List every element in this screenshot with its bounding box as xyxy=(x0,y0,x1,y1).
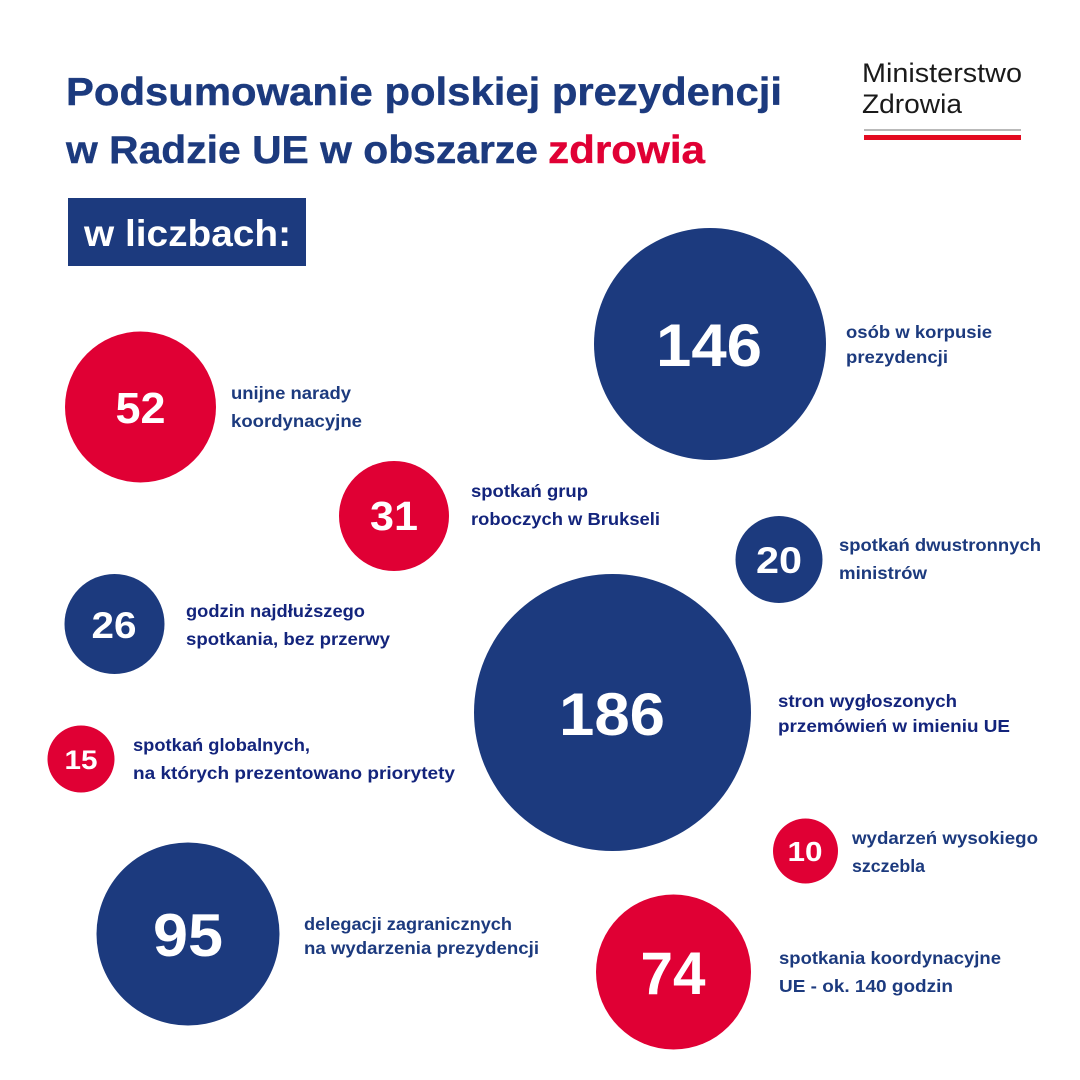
stat: 15: 15 xyxy=(64,745,98,775)
stat: 52: koordynacyjne xyxy=(231,411,362,431)
stat: 95 xyxy=(96,842,539,1026)
stat: 74 xyxy=(596,894,1001,1050)
stat: 146: 146 xyxy=(656,312,762,379)
stat: 74: 74 xyxy=(640,940,706,1007)
stat: 186: stron wygłoszonych xyxy=(778,691,957,711)
badge: w liczbach: w liczbach: xyxy=(83,213,291,254)
stat: 15: spotkań globalnych, xyxy=(133,735,310,755)
stat: 95: na wydarzenia prezydencji xyxy=(304,938,539,958)
stat: 26 xyxy=(64,574,390,674)
stat: 52 xyxy=(65,332,362,482)
stat: 186 xyxy=(474,574,1010,851)
stat: 20: ministrów xyxy=(839,563,927,583)
stat: 95: 95 xyxy=(153,902,223,969)
stat: 26: 26 xyxy=(92,605,136,646)
stat: 146 xyxy=(594,228,992,460)
stat: 186: 186 xyxy=(559,681,665,748)
stat: 52: unijne narady xyxy=(231,383,351,403)
stat: 10: wydarzeń wysokiego xyxy=(851,828,1038,848)
stat: 15: na których prezentowano priorytety xyxy=(133,763,455,783)
stat: 146: osób w korpusie xyxy=(846,322,992,342)
title: zdrowia xyxy=(548,129,705,172)
stat: 26: godzin najdłuższego xyxy=(186,601,365,621)
stat: 74: spotkania koordynacyjne xyxy=(779,948,1001,968)
stat: 31 xyxy=(339,461,660,571)
stat: 20 xyxy=(736,516,1041,603)
logo: Ministerstwo Zdrowia: Zdrowia xyxy=(862,89,962,119)
stat: 31: roboczych w Brukseli xyxy=(471,509,660,529)
logo: Ministerstwo Zdrowia xyxy=(862,58,1022,140)
stat: 10: szczebla xyxy=(852,856,925,876)
title xyxy=(65,71,782,172)
stat: 10: 10 xyxy=(788,836,822,867)
stat: 20: spotkań dwustronnych xyxy=(839,535,1041,555)
title: Podsumowanie polskiej prezydencji xyxy=(66,71,782,114)
badge: w liczbach xyxy=(68,198,306,266)
stat: 74: UE - ok. 140 godzin xyxy=(779,976,953,996)
stat: 15 xyxy=(48,726,455,792)
logo: Ministerstwo Zdrowia: Ministerstwo xyxy=(862,58,1022,88)
stat: 52: 52 xyxy=(116,384,166,433)
stat: 31: 31 xyxy=(370,493,418,539)
stat: 10 xyxy=(773,818,1038,884)
stat: 31: spotkań grup xyxy=(471,481,588,501)
stat: 186: przemówień w imieniu UE xyxy=(778,716,1010,736)
stat: 26: spotkania, bez przerwy xyxy=(186,629,390,649)
title: w Radzie UE w obszarze xyxy=(65,129,538,172)
stat: 20: 20 xyxy=(756,540,802,581)
stat: 146: prezydencji xyxy=(846,347,948,367)
stat: 95: delegacji zagranicznych xyxy=(304,914,512,934)
